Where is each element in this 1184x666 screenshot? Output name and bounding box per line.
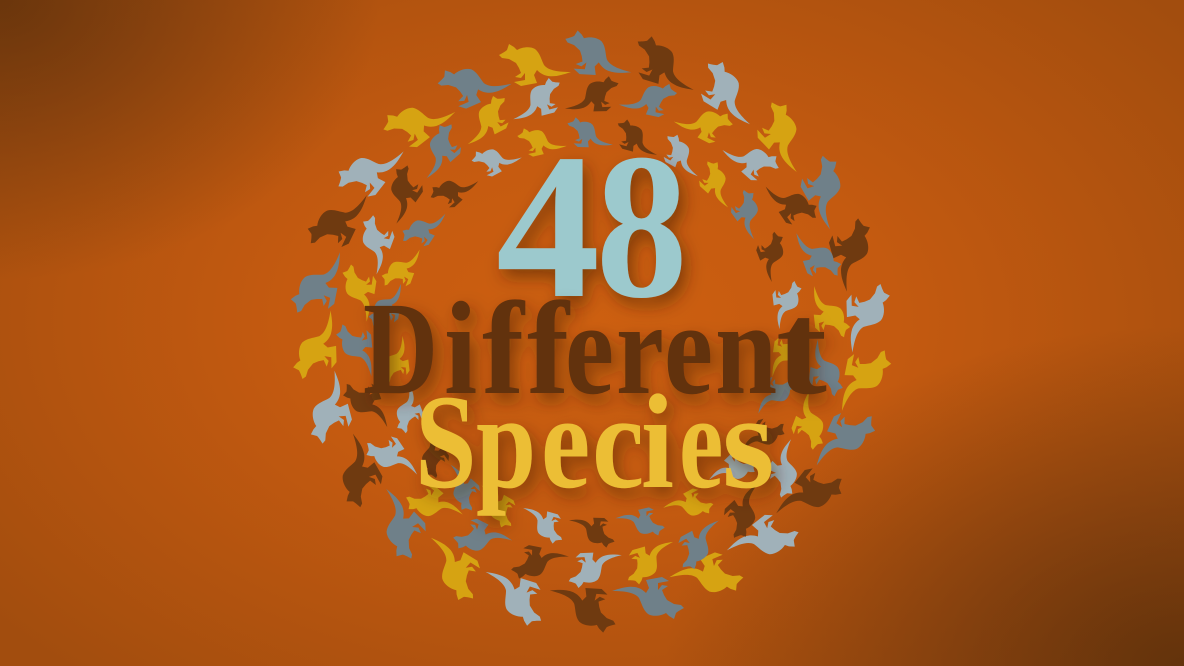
heading: 48: [496, 111, 688, 342]
heading: Species: c: [592, 368, 644, 517]
heading: Different: i: [444, 275, 477, 422]
heading: 48: 4: [496, 111, 600, 341]
heading: Different: r: [616, 275, 664, 423]
heading: Species: s: [722, 368, 775, 517]
heading: 48: 8: [596, 111, 688, 342]
middle ring of kangaroos: [332, 71, 853, 591]
heading: Different: [363, 275, 827, 423]
heading: Species: p: [476, 368, 536, 517]
heading: Different: n: [715, 275, 777, 422]
heading: Different: t: [776, 275, 827, 423]
heading: Different: f: [527, 275, 571, 423]
heading: Different: D: [363, 275, 438, 422]
heading: Species: S: [415, 367, 477, 517]
heading: Different: f: [482, 275, 526, 423]
inner ring of kangaroos: [365, 115, 809, 549]
heading: Species: e: [541, 367, 590, 517]
heading: Species: [415, 366, 775, 517]
outer ring of kangaroos: [286, 28, 896, 635]
heading: Different: e: [565, 275, 614, 422]
heading: Species: i: [641, 367, 674, 517]
heading: Species: e: [679, 366, 723, 517]
heading: Different: e: [664, 275, 713, 422]
